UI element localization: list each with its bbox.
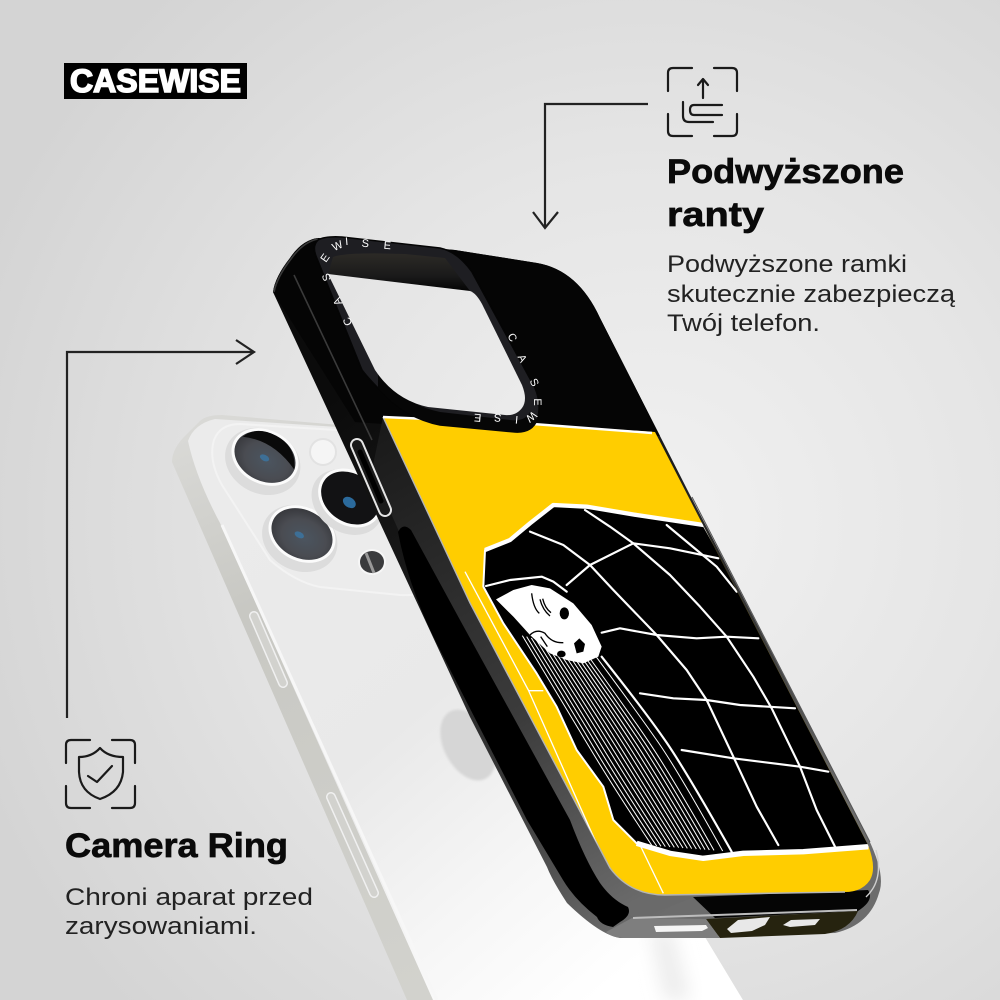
ring lettering: C	[505, 331, 519, 344]
ring lettering: I	[515, 413, 519, 425]
phone back panel	[188, 419, 743, 1000]
thin lines on yellow	[465, 572, 663, 893]
text: raised edges description: Podwyższone ramki	[667, 251, 907, 278]
heading: Podwyższone ranty: Podwyższone	[667, 153, 904, 191]
ring lettering: S	[361, 238, 369, 250]
text: camera ring description: zarysowaniami.	[65, 913, 257, 940]
ring inner wall	[328, 253, 470, 291]
heading: Camera Ring: Camera Ring	[65, 827, 288, 865]
flash	[310, 439, 336, 465]
lens 2	[250, 492, 349, 585]
port: microphone	[783, 919, 820, 927]
case silhouette	[273, 238, 881, 938]
lens 3	[299, 454, 397, 548]
logo: CASEWISE: CASEWISE	[70, 63, 241, 99]
bottom edge black section	[693, 890, 870, 918]
ring lettering: I	[345, 236, 349, 248]
frame highlight	[222, 525, 437, 1000]
sensor	[358, 549, 386, 575]
blanket grid lines	[486, 510, 835, 852]
port: charging	[727, 917, 770, 933]
text: camera ring description	[65, 884, 313, 940]
face	[496, 585, 602, 663]
ring body	[314, 237, 539, 432]
ring lettering: S	[320, 272, 334, 283]
ring lettering	[319, 236, 543, 425]
heading: Podwyższone ranty	[667, 153, 904, 234]
blanket and hair	[483, 505, 883, 858]
ring lettering: E	[474, 411, 482, 423]
ring lettering: A	[515, 353, 529, 365]
apple logo ghost	[429, 700, 507, 790]
bevel on case corner	[274, 239, 372, 440]
camera plateau	[212, 424, 430, 595]
side channel	[398, 526, 629, 927]
ring lettering: A	[331, 295, 345, 307]
text: camera ring description: Chroni aparat przed	[65, 884, 313, 911]
soft shadow on back panel	[650, 930, 690, 1000]
yellow top white line	[383, 417, 652, 433]
camera ring	[314, 236, 543, 432]
ring lower lip	[378, 373, 537, 432]
lens 1	[213, 415, 312, 508]
volume button	[357, 445, 385, 510]
yellow panel	[383, 417, 873, 895]
ring lettering: W	[330, 238, 346, 254]
bottom edge translucent section	[606, 918, 720, 938]
illustration: woman under a grid blanket	[465, 505, 883, 893]
white phone seen from the back	[172, 415, 743, 1000]
inner side band	[372, 417, 695, 918]
corner highlight	[866, 850, 878, 897]
icon: raised edges	[668, 68, 737, 136]
text: raised edges description: Twój telefon.	[667, 310, 820, 337]
arrow to raised rim	[533, 104, 648, 228]
case top black area	[273, 238, 660, 436]
bottom light line	[633, 910, 857, 918]
phone case	[273, 236, 883, 938]
right rim highlight	[692, 497, 870, 842]
port: speaker	[654, 925, 708, 932]
ring lettering: E	[319, 252, 333, 265]
blanket lower white band	[637, 843, 868, 858]
ring lettering: S	[527, 377, 541, 389]
hair strands	[522, 636, 723, 851]
arrow to camera ring	[67, 340, 254, 718]
heading: Podwyższone ranty: ranty	[667, 196, 764, 234]
ring lettering: E	[383, 240, 391, 252]
icon: shield	[66, 740, 135, 808]
panel left hairline	[383, 417, 845, 895]
phone frame	[172, 415, 743, 1000]
ring window	[328, 274, 525, 415]
ring lettering: C	[341, 315, 355, 327]
text: raised edges description	[667, 251, 956, 337]
blanket upper outline	[485, 505, 703, 550]
bottom edge olive section	[706, 911, 858, 938]
facial features	[530, 593, 585, 657]
side buttons	[254, 616, 374, 893]
ring lettering: S	[494, 411, 502, 423]
ring lettering: W	[523, 408, 539, 425]
text: raised edges description: skutecznie zabezpieczą	[667, 281, 956, 308]
ring lettering: E	[531, 398, 543, 406]
